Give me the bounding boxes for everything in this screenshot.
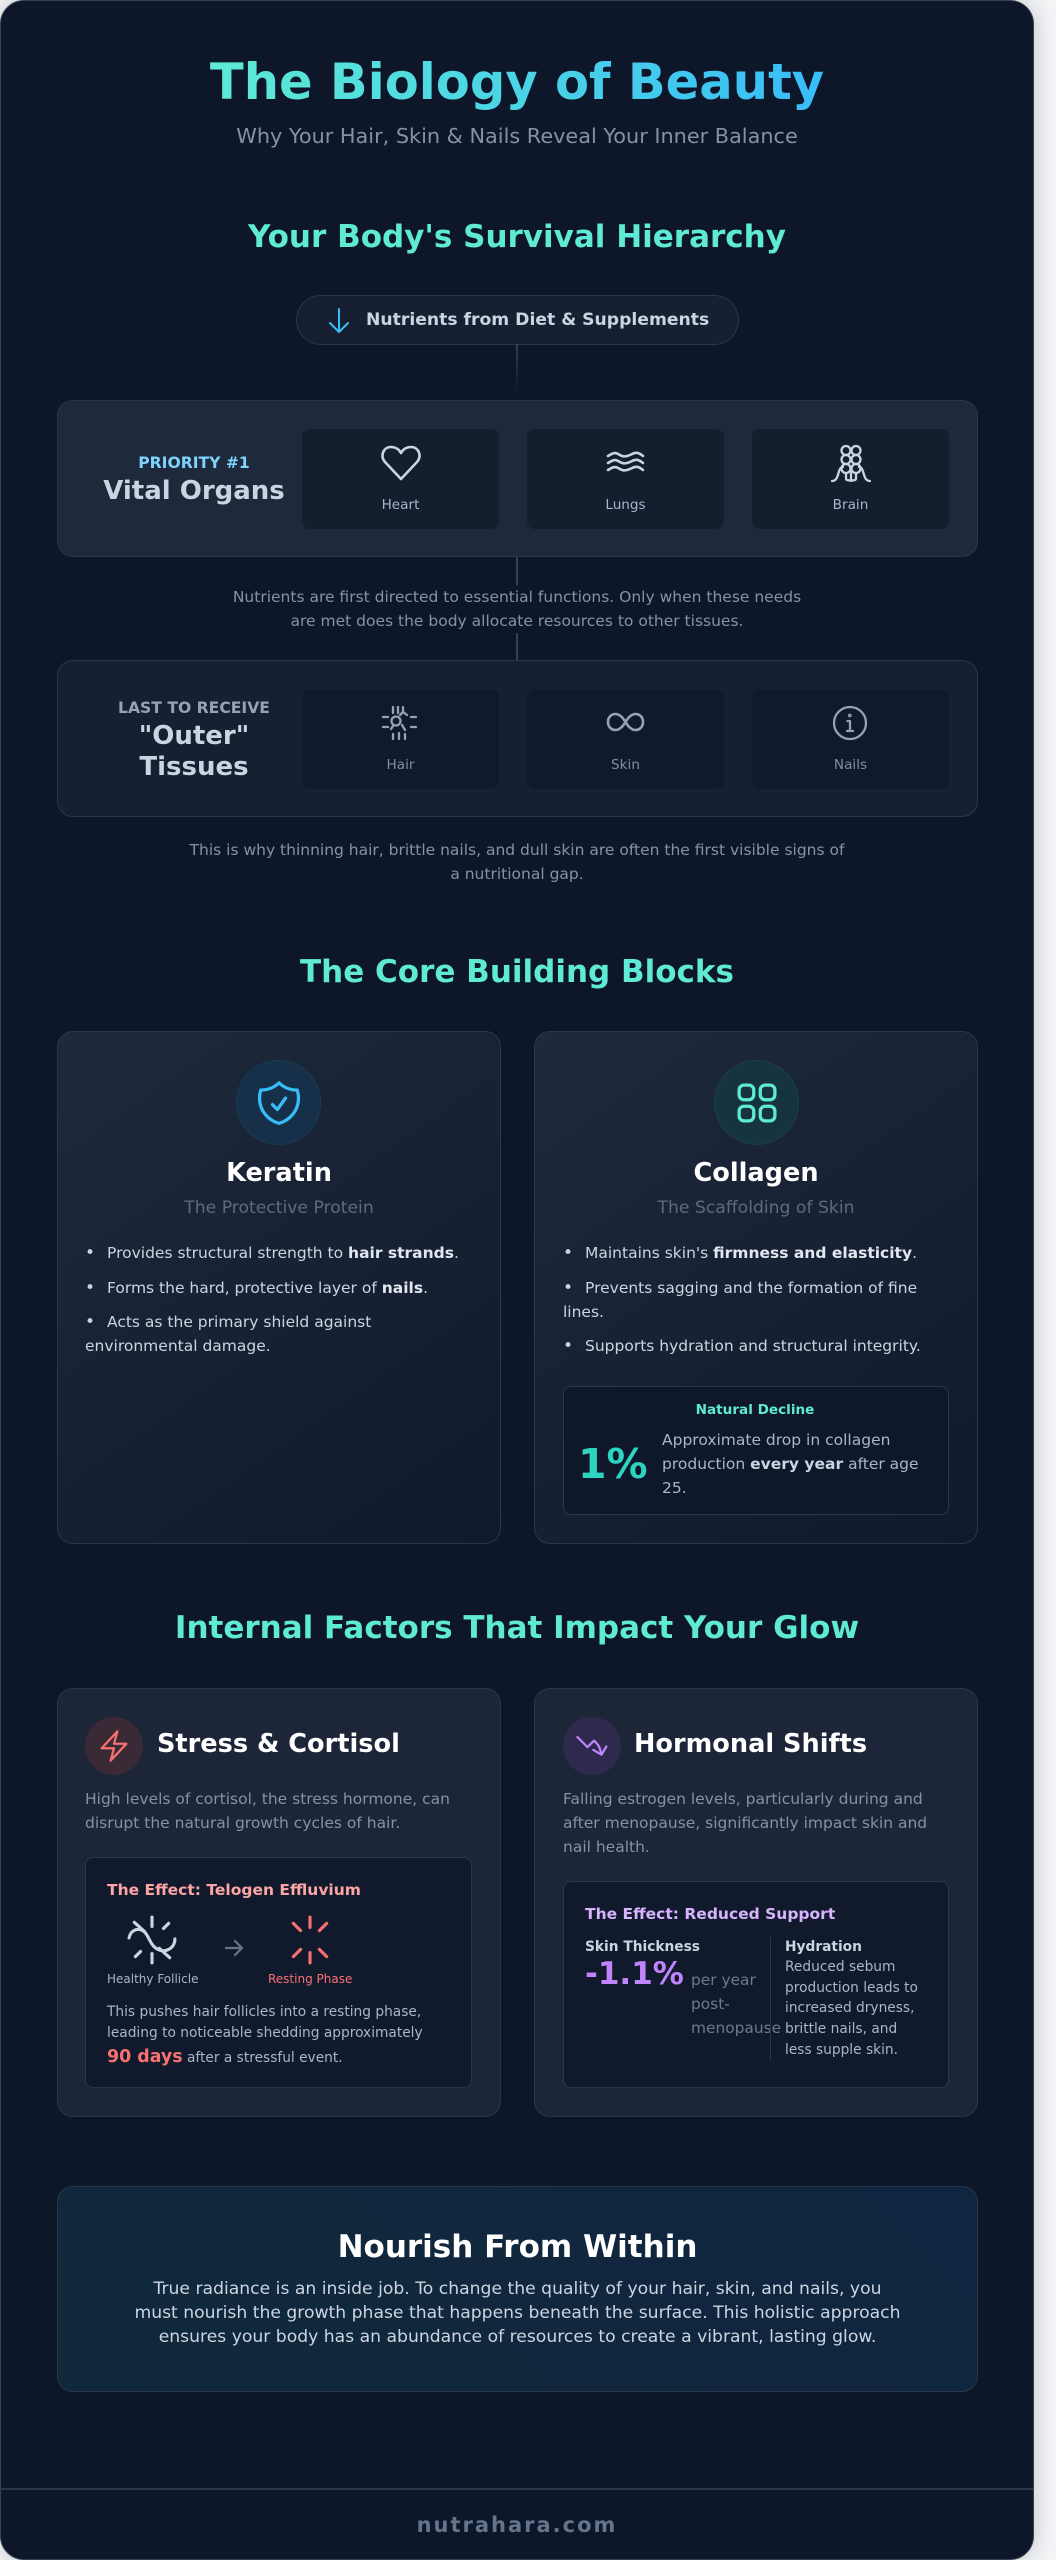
callout text: production every year after age: [662, 1455, 919, 1473]
effect text: [106, 2004, 423, 2067]
panel: collagen: [534, 1031, 978, 1544]
closing text: [134, 2279, 901, 2347]
label: outer tissues: "Outer": [139, 721, 249, 751]
effect heading: The Effect: Reduced Support: [585, 1905, 835, 1923]
icon: down arrow: [329, 308, 349, 333]
card subtitle: The Protective Protein: [184, 1198, 374, 1218]
bullet: •: [563, 1243, 573, 1263]
label: Lungs: [605, 497, 646, 513]
label: healthy: Healthy Follicle: [107, 1972, 198, 1986]
callout text: Approximate drop in collagen: [662, 1431, 890, 1449]
arrow: [225, 1940, 243, 1956]
heading: building blocks: The Core Building Blocks: [300, 954, 734, 990]
label: Hair: [387, 757, 414, 773]
bullet: lines.: [563, 1303, 604, 1321]
bullet: •: [85, 1312, 95, 1332]
card title: Collagen: [693, 1158, 819, 1188]
label: vital organs: Vital Organs: [103, 476, 285, 506]
pill label: Nutrients from Diet & Supplements: [366, 310, 709, 330]
bullet: [85, 1312, 371, 1355]
tile: skin: [527, 689, 724, 789]
panel: keratin: [57, 1031, 501, 1544]
panel: hormonal shifts: [534, 1688, 978, 2117]
effect box: [563, 1881, 949, 2088]
bullet: Acts as the primary shield against: [107, 1313, 371, 1331]
note: nutrient priority: [233, 588, 801, 630]
description: nail health.: [563, 1838, 650, 1856]
connector line: [516, 633, 518, 661]
bullet list: [563, 1243, 921, 1356]
closing heading: Nourish From Within: [338, 2229, 697, 2265]
metric text: production leads to: [785, 1980, 918, 1996]
effect text: This pushes hair follicles into a resting phase,: [107, 2004, 421, 2020]
card title: Keratin: [226, 1158, 332, 1188]
closing text: ensures your body has an abundance of resources to create a vibrant, lasting glow.: [159, 2327, 876, 2347]
tile: hair: [302, 689, 499, 789]
callout label: Natural Decline: [696, 1402, 814, 1418]
metric text: less supple skin.: [785, 2042, 898, 2058]
description: High levels of cortisol, the stress hormone, can: [85, 1790, 450, 1808]
note: nutrient priority: Nutrients are first directed to essential functions. Only when these needs: [233, 588, 801, 606]
connector line: [516, 557, 518, 585]
stat note: [691, 1971, 781, 2037]
icon: bolt: [85, 1717, 143, 1775]
panel: nourish from within: [57, 2186, 978, 2392]
effect box: [85, 1857, 472, 2088]
label: Heart: [382, 497, 419, 513]
metric title: Hydration: [785, 1939, 862, 1955]
description: Falling estrogen levels, particularly during and: [563, 1790, 923, 1808]
card title: Stress & Cortisol: [157, 1729, 400, 1759]
icon: resting phase: [292, 1916, 328, 1964]
effect heading: The Effect: Telogen Effluvium: [107, 1881, 361, 1899]
bullet: Prevents sagging and the formation of fine: [585, 1279, 917, 1297]
bullet: •: [85, 1243, 95, 1263]
panel: stress and cortisol: [57, 1688, 501, 2117]
effect text: 90 days after a stressful event.: [107, 2047, 343, 2067]
description: after menopause, significantly impact skin and: [563, 1814, 927, 1832]
bullet list: [85, 1243, 459, 1355]
callout text: 25.: [662, 1479, 687, 1497]
icon: brain: [830, 444, 872, 482]
description: [563, 1790, 927, 1856]
stat note: per year: [691, 1971, 756, 1989]
panel: outer tissues: [57, 660, 978, 817]
metric: skin thickness: Skin Thickness: [585, 1939, 700, 1955]
panel: vital organs: [57, 400, 978, 557]
closing text: True radiance is an inside job. To change the quality of your hair, skin, and nails, you: [154, 2279, 882, 2299]
metric text: increased dryness,: [785, 2000, 914, 2016]
callout text: [662, 1431, 919, 1497]
card subtitle: The Scaffolding of Skin: [658, 1198, 854, 1218]
label: Skin: [611, 757, 640, 773]
stat note: post-: [691, 1995, 730, 2013]
label: outer tissues: Tissues: [139, 752, 249, 782]
icon: healthy follicle: [128, 1916, 176, 1964]
tile: lungs: [527, 429, 724, 529]
bullet: Maintains skin's firmness and elasticity.: [585, 1244, 917, 1262]
note: first visible signs: This is why thinning hair, brittle nails, and dull skin are often the first visible signs of: [190, 841, 844, 859]
heading: internal factors: Internal Factors That Impact Your Glow: [175, 1610, 859, 1646]
icon: waves: [606, 452, 644, 472]
connector line: [516, 344, 518, 392]
effect text: leading to noticeable shedding approximately: [107, 2025, 423, 2041]
bullet: •: [563, 1336, 573, 1356]
icon: infinity: [606, 712, 644, 732]
bullet: •: [85, 1278, 95, 1298]
note: nutrient priority: are met does the body allocate resources to other tissues.: [291, 612, 743, 630]
tile: nails: [752, 689, 949, 789]
label: Brain: [833, 497, 868, 513]
metric: hydration: [785, 1939, 918, 2058]
bullet: environmental damage.: [85, 1337, 271, 1355]
subtitle: Why Your Hair, Skin & Nails Reveal Your Inner Balance: [236, 124, 798, 148]
icon: info circle: [832, 706, 868, 740]
icon: heart: [381, 446, 421, 480]
bullet: Provides structural strength to hair strands.: [107, 1244, 459, 1262]
bullet: Forms the hard, protective layer of nails.: [107, 1279, 428, 1297]
tile: brain: [752, 429, 949, 529]
heading: survival hierarchy: Your Body's Survival Hierarchy: [248, 219, 786, 255]
icon: squares: [714, 1060, 799, 1145]
pill: nutrients source: [296, 295, 739, 345]
icon: hair: [382, 706, 418, 740]
stat note: menopause: [691, 2019, 781, 2037]
metric text: Reduced sebum: [785, 1959, 895, 1975]
icon: trending down: [563, 1717, 621, 1775]
label: outer tissues: [139, 721, 249, 782]
card title: Hormonal Shifts: [634, 1729, 867, 1759]
bullet: [563, 1278, 917, 1321]
metric text: brittle nails, and: [785, 2021, 897, 2037]
stat: one percent: 1%: [578, 1440, 648, 1488]
icon: shield: [236, 1060, 321, 1145]
label: priority: PRIORITY #1: [138, 454, 250, 472]
metric text: [785, 1959, 918, 2058]
tile: heart: [302, 429, 499, 529]
note: first visible signs: [189, 841, 845, 883]
label: last to receive: LAST TO RECEIVE: [118, 699, 270, 717]
description: [85, 1790, 450, 1832]
closing text: must nourish the growth phase that happens beneath the surface. This holistic approach: [134, 2303, 901, 2323]
note: first visible signs: a nutritional gap.: [450, 865, 584, 883]
label: resting: Resting Phase: [268, 1972, 352, 1986]
footer: [1, 2488, 1035, 2560]
label: Nails: [834, 757, 867, 773]
bullet: Supports hydration and structural integrity.: [585, 1337, 921, 1355]
callout: natural decline: [563, 1386, 949, 1515]
footer url: nutrahara.com: [417, 2513, 617, 2537]
description: disrupt the natural growth cycles of hair.: [85, 1814, 400, 1832]
title: The Biology of Beauty: [210, 53, 824, 111]
divider: [770, 1937, 771, 2061]
stat: minus 1.1 percent: -1.1%: [585, 1956, 684, 1992]
bullet: •: [563, 1278, 573, 1298]
